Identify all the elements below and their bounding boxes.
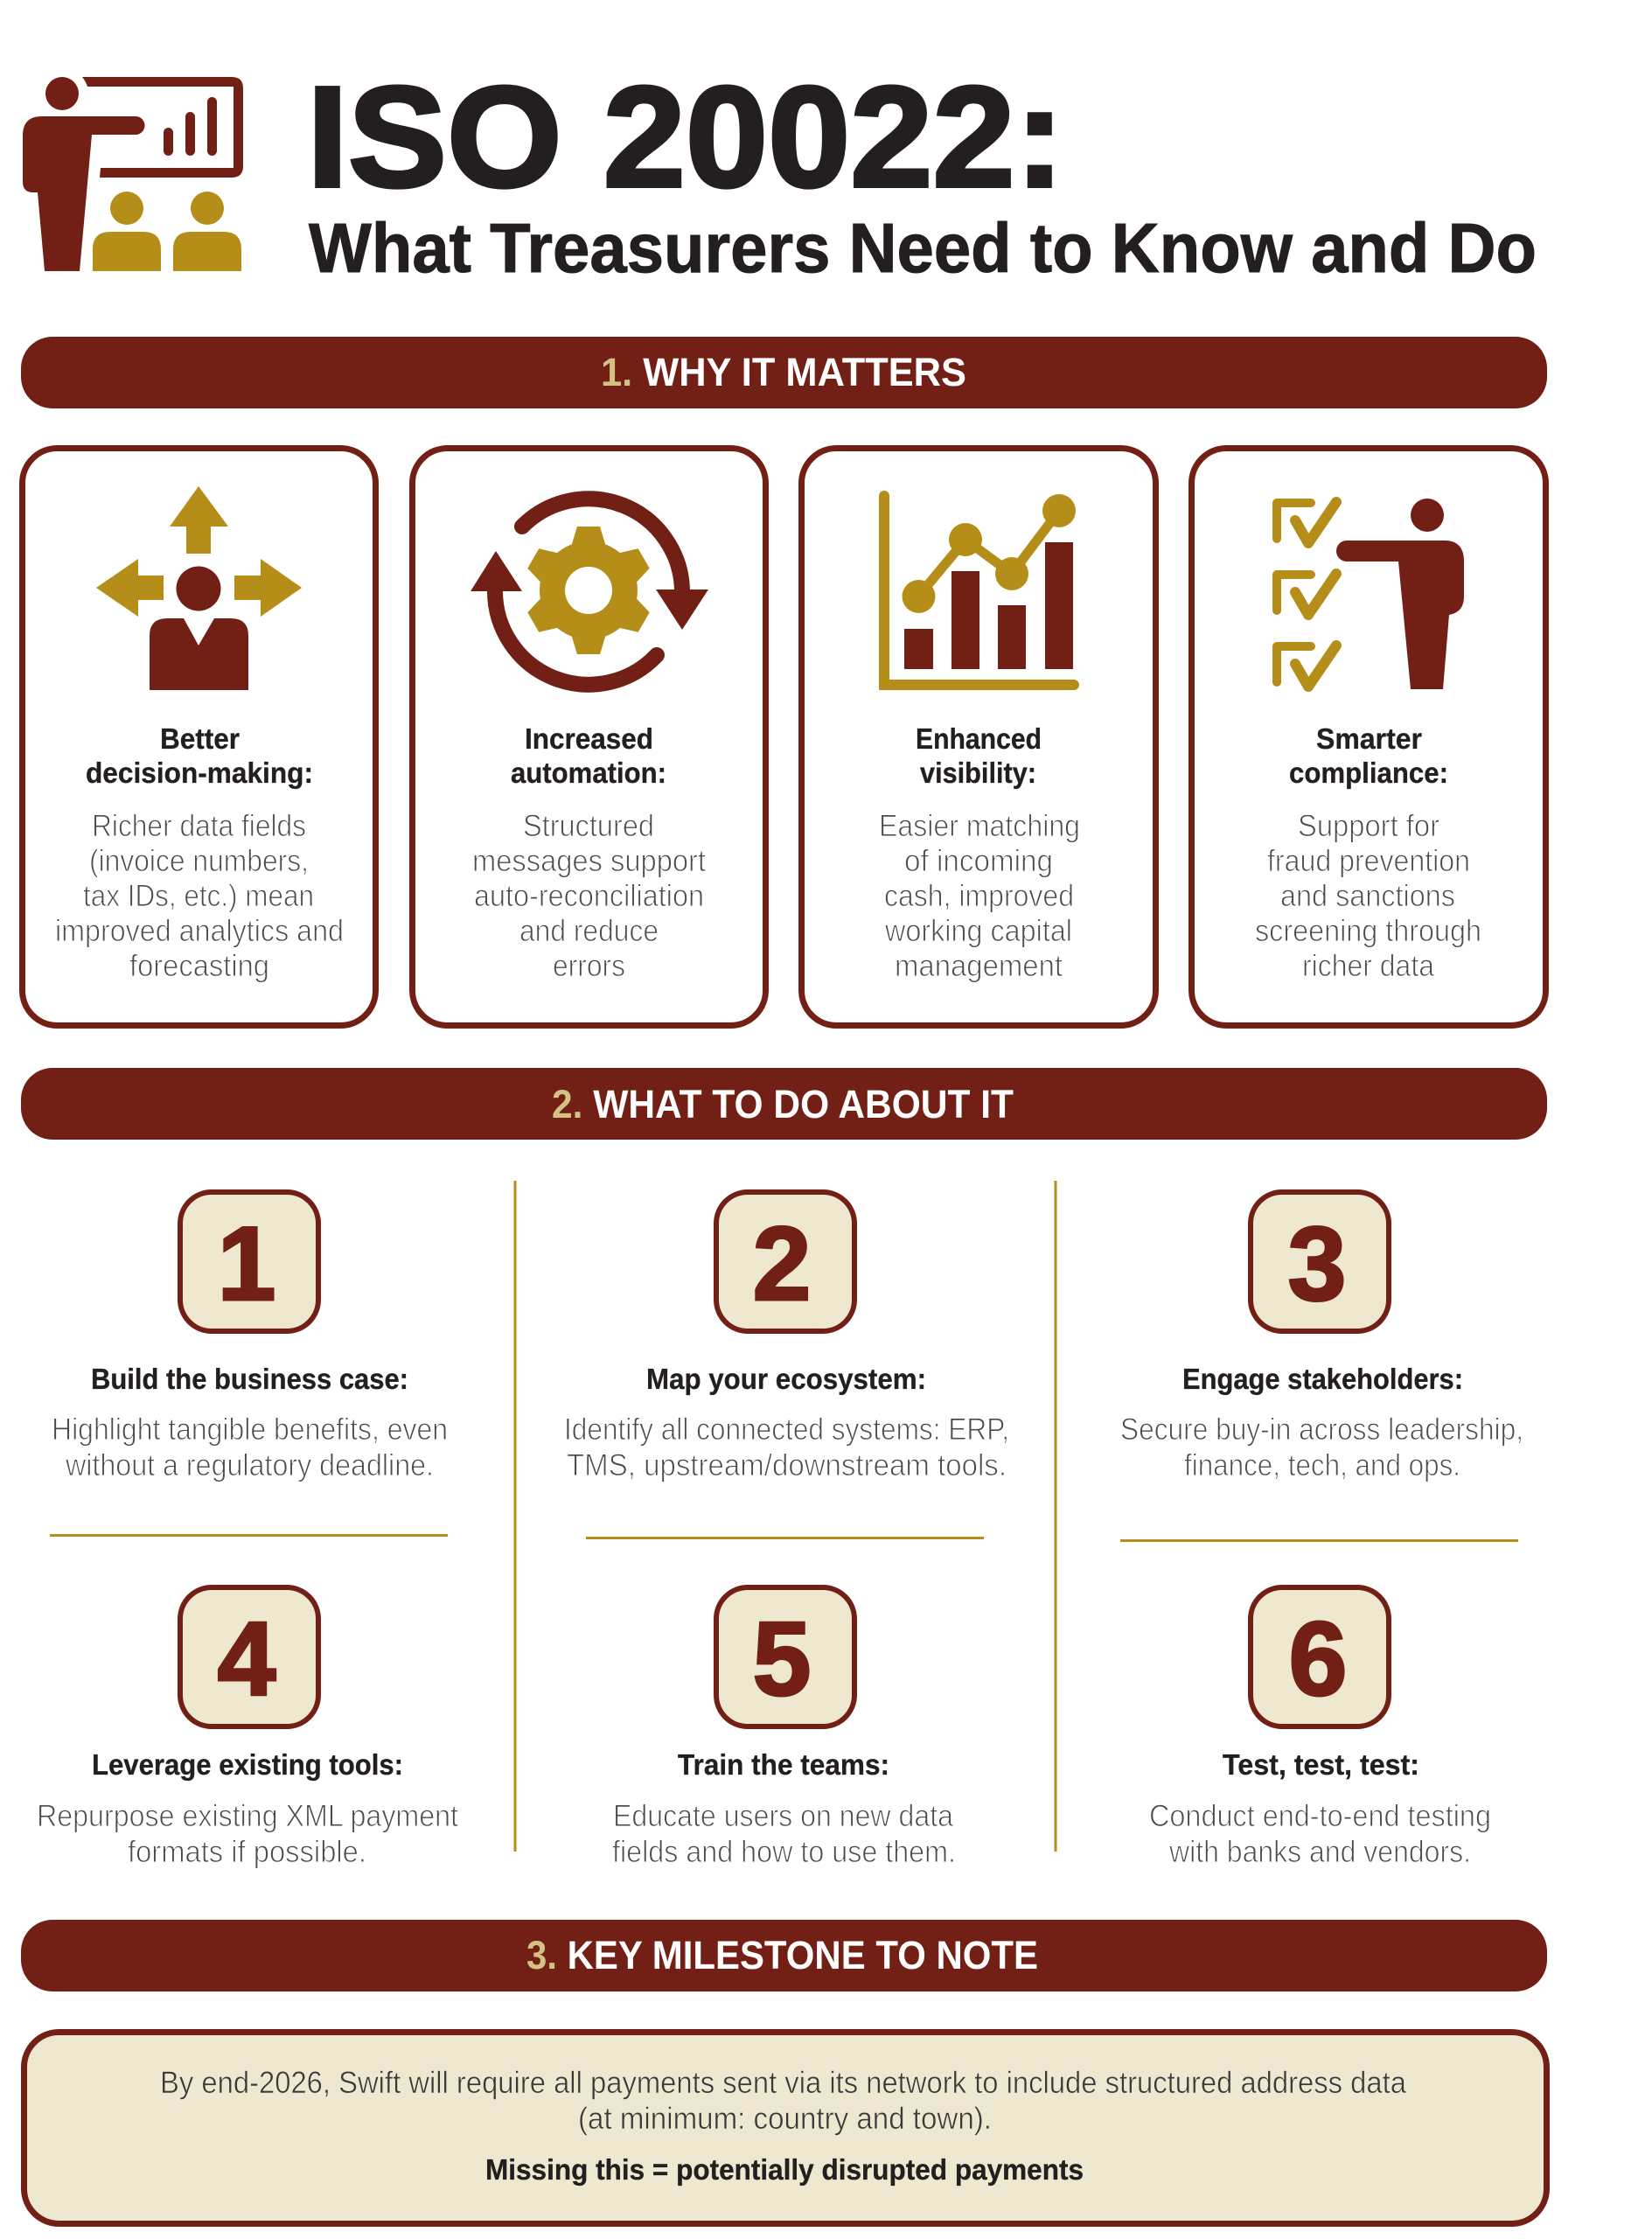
- heading: enhanced visibility: visibility:: [920, 757, 1036, 789]
- heading: better decision-making: [86, 722, 313, 789]
- text: step 5: fields and how to use them.: [612, 1835, 956, 1869]
- step 5: train the teams: [612, 1587, 956, 1869]
- text: step 4: [37, 1799, 458, 1869]
- section banner 1: 1. WHY IT MATTERS: [601, 350, 966, 394]
- text: step 2: TMS, upstream/downstream tools.: [567, 1448, 1007, 1482]
- title: ISO 20022:: [307, 57, 1064, 217]
- text: better decision-making: (invoice numbers,: [89, 844, 309, 878]
- text: enhanced visibility: management: [895, 949, 1063, 983]
- step 6: test, test, test: [1149, 1587, 1491, 1869]
- number badge 5: 5: [753, 1601, 811, 1718]
- text: smarter compliance: screening through: [1255, 914, 1481, 948]
- icon: checklist and person: [1277, 499, 1464, 689]
- text: increased automation: errors: [553, 949, 625, 983]
- text: better decision-making: improved analytics and: [55, 914, 344, 948]
- number badge 2: [716, 1192, 854, 1331]
- text: step 3: [1120, 1412, 1523, 1482]
- step 2: map your ecosystem: [564, 1192, 1009, 1482]
- heading: step 6: Test, test, test:: [1223, 1748, 1419, 1781]
- icon: gear with cycle arrows: [471, 499, 708, 685]
- step 4: leverage existing tools: [37, 1587, 458, 1869]
- panel: better decision-making: [23, 448, 376, 1025]
- text: increased automation: [472, 809, 706, 983]
- number badge 6: [1251, 1587, 1389, 1726]
- text: better decision-making: tax IDs, etc.) mean: [83, 879, 314, 913]
- text: step 1: Highlight tangible benefits, even: [52, 1412, 448, 1447]
- text: increased automation: Structured: [523, 809, 654, 843]
- heading: step 4: Leverage existing tools:: [92, 1748, 403, 1781]
- text: enhanced visibility: cash, improved: [884, 879, 1074, 913]
- text: smarter compliance: and sanctions: [1280, 879, 1455, 913]
- panel: smarter compliance: [1191, 448, 1546, 1025]
- text: smarter compliance: [1255, 809, 1481, 983]
- icon: person with arrows: [96, 486, 302, 690]
- text: better decision-making: Richer data fields: [92, 809, 306, 843]
- step 1: build the business case: [52, 1192, 448, 1482]
- text: step 5: [612, 1799, 956, 1869]
- text: better decision-making: [55, 809, 344, 983]
- text: enhanced visibility: of incoming: [904, 844, 1053, 878]
- panel: increased automation: [413, 448, 766, 1025]
- text: smarter compliance: richer data: [1302, 949, 1434, 983]
- number badge 1: [180, 1192, 318, 1331]
- number badge 3: 3: [1288, 1205, 1346, 1322]
- section banner 3: 3. KEY MILESTONE TO NOTE: [526, 1933, 1038, 1977]
- heading: enhanced visibility: [916, 722, 1042, 789]
- number badge 4: [180, 1587, 318, 1726]
- text: step 6: with banks and vendors.: [1168, 1835, 1471, 1869]
- section banner 3: [21, 1920, 1547, 1991]
- text: step 1: without a regulatory deadline.: [65, 1448, 434, 1482]
- text: step 2: Identify all connected systems: ERP,: [564, 1412, 1009, 1447]
- heading: smarter compliance: [1289, 722, 1448, 789]
- heading: increased automation: automation:: [511, 757, 666, 789]
- text: step 4: formats if possible.: [128, 1835, 366, 1869]
- section banner 2: 2. WHAT TO DO ABOUT IT: [552, 1082, 1014, 1126]
- text: smarter compliance: Support for: [1298, 809, 1439, 843]
- callout: key milestone: By end-2026, Swift will require all payments sent via its network to include structured address data: [160, 2066, 1406, 2100]
- heading: step 5: Train the teams:: [678, 1748, 889, 1781]
- text: step 1: [52, 1412, 448, 1482]
- header icon: presenter and audience: [23, 77, 243, 271]
- number badge 4: 4: [218, 1601, 276, 1718]
- text: smarter compliance: fraud prevention: [1267, 844, 1470, 878]
- heading: smarter compliance: compliance:: [1289, 757, 1448, 789]
- callout: key milestone: [24, 2033, 1546, 2223]
- panel: enhanced visibility: [801, 448, 1156, 1025]
- number badge 3: [1251, 1192, 1389, 1331]
- callout: key milestone: Missing this = potentially disrupted payments: [485, 2153, 1084, 2186]
- heading: step 3: Engage stakeholders:: [1182, 1363, 1463, 1395]
- number badge 1: 1: [218, 1205, 275, 1322]
- subtitle: What Treasurers Need to Know and Do: [309, 209, 1537, 287]
- text: step 3: finance, tech, and ops.: [1184, 1448, 1460, 1482]
- text: better decision-making: forecasting: [129, 949, 269, 983]
- text: enhanced visibility: working capital: [884, 914, 1072, 948]
- heading: smarter compliance: Smarter: [1316, 722, 1422, 755]
- text: step 6: [1149, 1799, 1491, 1869]
- heading: better decision-making: decision-making:: [86, 757, 313, 789]
- text: step 2: [564, 1412, 1009, 1482]
- icon: bar chart with trend line: [879, 491, 1079, 690]
- text: increased automation: and reduce: [519, 914, 659, 948]
- section banner 1: [21, 337, 1547, 408]
- callout: key milestone: (at minimum: country and town).: [578, 2102, 992, 2136]
- heading: better decision-making: Better: [160, 722, 240, 755]
- heading: step 1: Build the business case:: [91, 1363, 408, 1395]
- number badge 6: 6: [1289, 1601, 1347, 1718]
- heading: increased automation: Increased: [525, 722, 653, 755]
- text: enhanced visibility: Easier matching: [879, 809, 1080, 843]
- step 3: engage stakeholders: [1120, 1192, 1523, 1482]
- section banner 2: [21, 1068, 1547, 1140]
- number badge 5: [716, 1587, 854, 1726]
- text: increased automation: auto-reconciliation: [474, 879, 704, 913]
- text: enhanced visibility: [879, 809, 1080, 983]
- text: step 4: Repurpose existing XML payment: [37, 1799, 458, 1833]
- number badge 2: 2: [753, 1205, 811, 1322]
- text: step 6: Conduct end-to-end testing: [1149, 1799, 1491, 1833]
- heading: increased automation: [511, 722, 666, 789]
- text: step 5: Educate users on new data: [613, 1799, 953, 1833]
- heading: step 2: Map your ecosystem:: [646, 1363, 926, 1395]
- text: increased automation: messages support: [472, 844, 706, 878]
- heading: enhanced visibility: Enhanced: [916, 722, 1042, 755]
- text: step 3: Secure buy-in across leadership,: [1120, 1412, 1523, 1447]
